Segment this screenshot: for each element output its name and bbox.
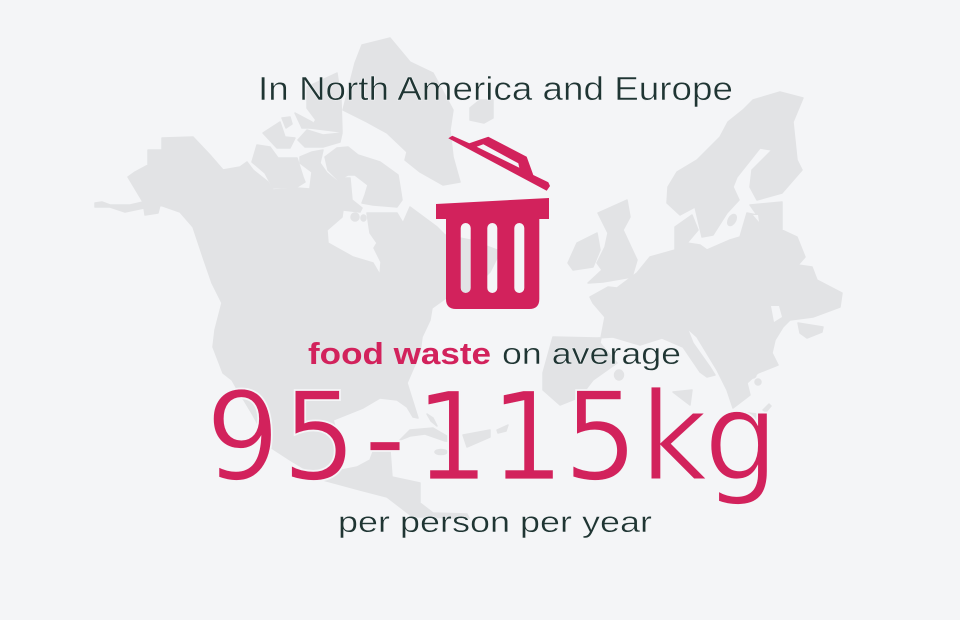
map: Banks and Queen Elizabeth islands [263, 122, 295, 148]
map: Crete [740, 412, 757, 419]
map: Iceland [470, 100, 493, 123]
label: food waste: food waste [308, 336, 491, 371]
map: Sardinia [614, 370, 624, 380]
icon: bin lid [448, 136, 550, 191]
map: Sicily [673, 390, 692, 405]
map: Victoria Island [252, 145, 305, 188]
big number: 95-115kg [206, 367, 778, 509]
map: continental Europe [543, 202, 842, 408]
map: Great Britain [588, 200, 637, 283]
map: Crimea [798, 323, 823, 338]
map: small Arctic islands [282, 113, 342, 147]
map: Southampton Islands [351, 213, 366, 221]
map: Ellesmere Island [307, 73, 342, 132]
label: food waste on average [308, 336, 681, 371]
map: Baffin Island [325, 147, 402, 207]
heading: In North America and Europe [258, 70, 733, 107]
map: North American mainland [95, 137, 497, 518]
label: on average: on average [502, 336, 681, 371]
icon: bin body with three slots [436, 198, 549, 309]
map: Somerset and Prince of Wales islands [300, 150, 338, 190]
map: Jamaica [435, 450, 447, 454]
inland sea and gulf cut-outs [240, 215, 782, 437]
background map: North America and Europe [95, 38, 842, 518]
map: Puerto Rico [497, 425, 508, 433]
map: Hispaniola [463, 430, 490, 447]
map: Bahamas [427, 414, 437, 426]
map: Ireland [568, 233, 600, 270]
map: Gotland [726, 213, 738, 227]
label: per person per year: per person per year [338, 506, 652, 539]
map: Cuba [400, 428, 457, 442]
map: Greenland [343, 38, 460, 185]
map: Greek and Cypriot islands [750, 372, 771, 412]
map: Scandinavia and Finland [667, 92, 803, 237]
icon: rubbish bin with lid open [436, 136, 550, 309]
